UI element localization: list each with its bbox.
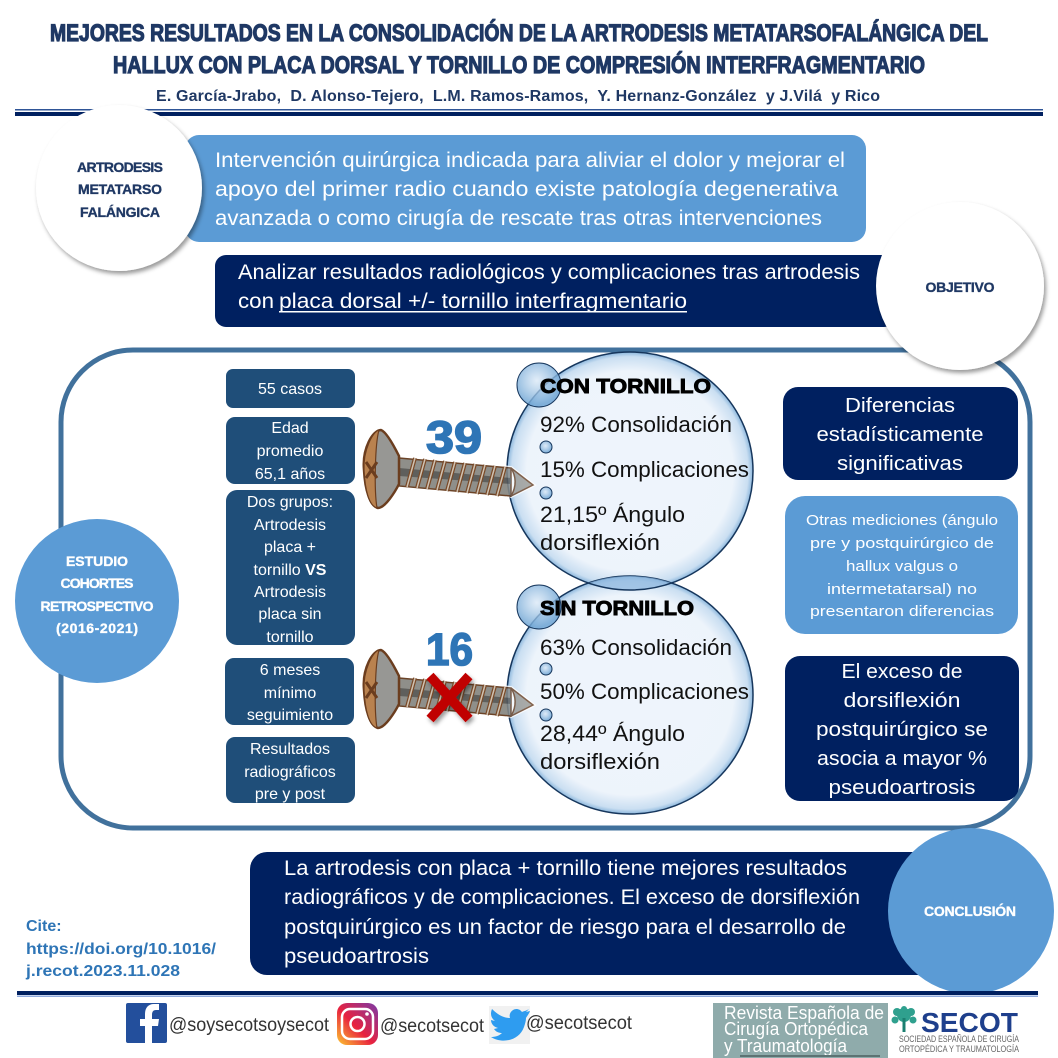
badge: estudio — [15, 519, 179, 683]
box: otras mediciones: pre y postquirúrgico de — [810, 535, 994, 552]
box: grupos: placa sin — [258, 606, 322, 623]
box: exceso dorsiflexion: El exceso de — [842, 661, 962, 683]
box: exceso dorsiflexion: pseudoartrosis — [828, 777, 976, 799]
badge: estudio: ESTUDIO — [66, 553, 128, 569]
title — [50, 19, 988, 79]
box: diferencias — [783, 387, 1018, 480]
text: sin tornillo results: 63% Consolidación — [540, 635, 732, 660]
badge: estudio: COHORTES — [60, 575, 134, 591]
bubble: con tornillo — [507, 352, 753, 590]
text: con tornillo results — [540, 376, 749, 555]
box: otras mediciones: hallux valgus o — [846, 558, 958, 575]
box: casos — [226, 369, 355, 408]
box: exceso dorsiflexion: dorsiflexión — [844, 690, 960, 712]
box: otras mediciones: presentaron diferencias — [810, 603, 994, 620]
box: resultados: radiográficos — [244, 764, 336, 781]
icon: instagram — [337, 1003, 378, 1045]
box: resultados: pre y post — [255, 786, 326, 803]
logo: revista: Revista Española de — [724, 1003, 884, 1023]
panel: introduction: apoyo del primer radio cuando existe patología degenerativa — [215, 178, 838, 201]
box: grupos: Artrodesis — [254, 517, 326, 534]
text: sin tornillo results: 28,44º Ángulo — [540, 721, 685, 746]
box: exceso dorsiflexion: asocia a mayor % — [817, 748, 987, 770]
handle: facebook: @soysecotsoysecot — [169, 1015, 330, 1036]
text: con tornillo results: 92% Consolidación — [540, 412, 732, 437]
box: otras mediciones: intermetatarsal) no — [827, 581, 977, 598]
badge: estudio: (2016-2021) — [56, 620, 138, 636]
badge: artrodesis: ARTRODESIS — [77, 159, 163, 175]
logo: secot: SECOT — [921, 1007, 1018, 1038]
box: seguimiento: 6 meses — [260, 662, 320, 679]
citation: Cite: — [26, 918, 62, 935]
logo: secot — [892, 1006, 1019, 1054]
box: edad — [226, 417, 355, 484]
box: otras mediciones — [785, 496, 1018, 634]
citation: j.recot.2023.11.028 — [25, 963, 180, 980]
logo: revista: y Traumatología — [724, 1036, 848, 1056]
handle: twitter: @secotsecot — [526, 1013, 633, 1034]
box: exceso dorsiflexion: postquirúrgico se — [816, 719, 988, 741]
citation — [25, 918, 217, 980]
text: sin tornillo results: SIN TORNILLO — [540, 598, 694, 620]
panel: objective text — [215, 255, 895, 327]
icon: screw with — [364, 430, 533, 508]
handle: instagram: @secotsecot — [380, 1016, 485, 1037]
text: con tornillo results: CON TORNILLO — [540, 376, 711, 398]
box: grupos: tornillo — [266, 629, 314, 646]
box: grupos: Dos grupos: — [247, 494, 333, 511]
box: diferencias: Diferencias — [845, 395, 955, 417]
box: casos: 55 casos — [258, 381, 322, 398]
box: seguimiento: seguimiento — [247, 707, 333, 724]
box: resultados — [226, 737, 355, 803]
text: con tornillo results: 21,15º Ángulo — [540, 502, 685, 527]
panel: objective text: Analizar resultados radiológicos y complicaciones tras artrodesis — [238, 261, 860, 284]
icon: red cross — [430, 676, 469, 719]
panel: study frame — [61, 350, 1030, 828]
number: 16: 16 — [426, 624, 473, 675]
logo: secot: SOCIEDAD ESPAÑOLA DE CIRUGÍA — [899, 1034, 1019, 1044]
authors: E. García-Jrabo, D. Alonso-Tejero, L.M. Ramos-Ramos, Y. Hernanz-González y J.Vilá y Rico — [156, 88, 880, 105]
screw tips inside bubbles — [506, 466, 536, 718]
box: seguimiento — [225, 658, 354, 725]
text: con tornillo results: 15% Complicaciones — [540, 457, 749, 482]
box: grupos — [226, 490, 355, 646]
icon: twitter — [489, 1006, 530, 1044]
text: con tornillo results: dorsiflexión — [540, 530, 660, 555]
panel: introduction: avanzada o como cirugía de rescate tras otras intervenciones — [215, 207, 822, 230]
badge: objetivo — [876, 202, 1044, 370]
logo: revista: Cirugía Ortopédica — [724, 1019, 869, 1039]
box: resultados: Resultados — [250, 741, 330, 758]
badge: artrodesis: METATARSO — [78, 181, 162, 197]
panel: conclusion text: pseudoartrosis — [284, 945, 429, 968]
icon: facebook — [126, 1003, 167, 1043]
icon: screw crossed — [364, 650, 533, 728]
text: sin tornillo results — [540, 598, 749, 774]
badge: estudio: RETROSPECTIVO — [40, 598, 154, 614]
box: exceso dorsiflexion — [785, 656, 1019, 801]
citation: https://doi.org/10.1016/ — [26, 941, 217, 958]
logo: revista — [713, 1003, 888, 1058]
box: seguimiento: mínimo — [264, 685, 316, 702]
text: sin tornillo results: dorsiflexión — [540, 749, 660, 774]
panel: objective text: con — [238, 290, 274, 313]
box: diferencias: estadísticamente — [816, 424, 984, 446]
badge: artrodesis: FALÁNGICA — [80, 204, 160, 220]
box: diferencias: significativas — [837, 453, 963, 475]
box: otras mediciones: Otras mediciones (ángulo — [806, 512, 998, 529]
box: edad: 65,1 años — [255, 466, 325, 483]
panel: introduction: Intervención quirúrgica indicada para aliviar el dolor y mejorar el — [215, 149, 845, 172]
badge: artrodesis — [36, 105, 202, 271]
badge: conclusion — [888, 828, 1054, 994]
panel: conclusion text: radiográficos y de complicaciones. El exceso de dorsiflexión — [284, 886, 860, 909]
panel: conclusion text — [250, 852, 970, 975]
badge: objetivo: OBJETIVO — [926, 279, 995, 295]
box: edad: promedio — [257, 443, 323, 460]
panel: introduction — [185, 135, 866, 242]
panel: objective text: placa dorsal +/- tornillo interfragmentario — [279, 290, 687, 313]
bubble: sin tornillo — [506, 575, 754, 815]
logo: secot: ORTOPÉDICA Y TRAUMATOLOGÍA — [899, 1044, 1019, 1054]
badge: conclusion: CONCLUSIÓN — [924, 902, 1016, 919]
number: 39: 39 — [426, 412, 482, 463]
panel: conclusion text: postquirúrgico es un factor de riesgo para el desarrollo de — [284, 916, 846, 939]
box: grupos: Artrodesis — [254, 584, 326, 601]
box: grupos: tornillo VS — [254, 562, 327, 579]
box: edad: Edad — [271, 420, 309, 437]
box: grupos: placa + — [264, 539, 316, 556]
text: sin tornillo results: 50% Complicaciones — [540, 679, 749, 704]
panel: conclusion text: La artrodesis con placa + tornillo tiene mejores resultados — [284, 857, 847, 880]
